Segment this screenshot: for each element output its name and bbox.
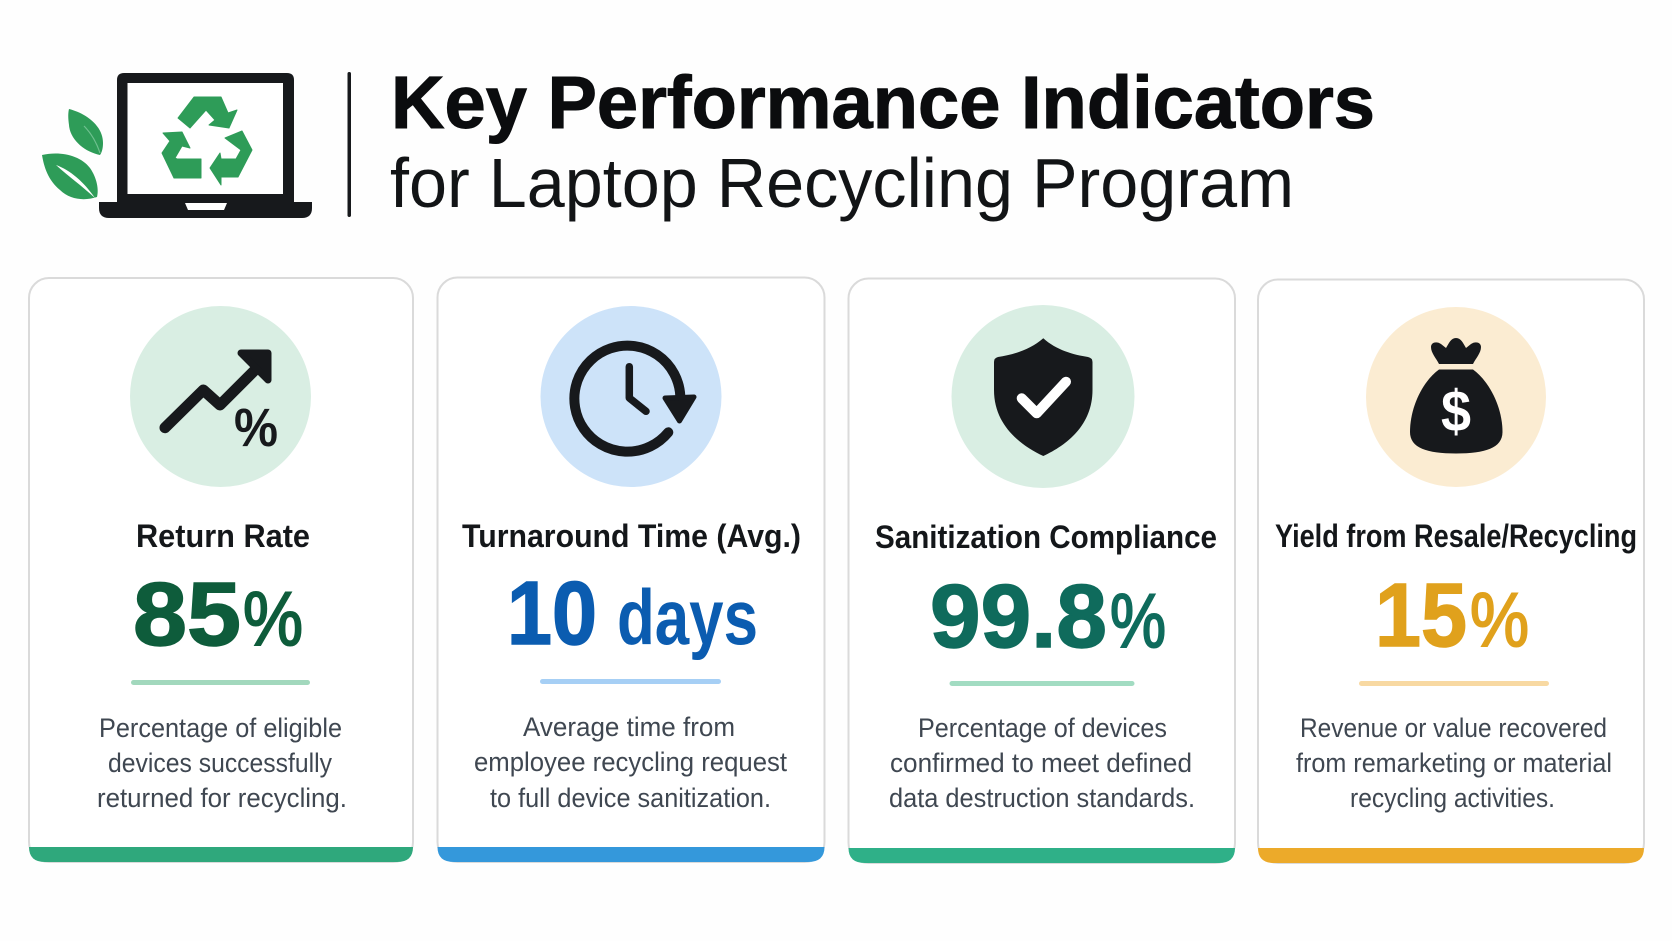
kpi name: Sanitization Compliance — [875, 519, 1217, 555]
kpi value: % — [243, 577, 303, 662]
panel: yield from resale/recycling — [1258, 280, 1644, 863]
kpi value: % — [1470, 578, 1529, 663]
icon: shield with check — [994, 338, 1092, 456]
description: from remarketing or material — [1296, 748, 1612, 778]
panel: sanitization compliance — [848, 278, 1235, 863]
header logo: laptop with recycling symbol and leaves — [42, 73, 312, 218]
icon: clock with arrow — [574, 346, 694, 452]
kpi value: % — [1110, 579, 1166, 664]
kpi value: 10 — [507, 564, 597, 664]
kpi value: 85 — [133, 565, 241, 665]
icon: money bag — [1410, 338, 1502, 454]
header divider — [348, 72, 351, 217]
heading: key performance indicators: Key Performance Indicators — [391, 61, 1375, 144]
panel: return rate — [29, 278, 413, 862]
description: Percentage of devices — [918, 713, 1167, 743]
description — [474, 712, 787, 813]
icon: rising arrow with percent — [165, 353, 278, 458]
description — [97, 713, 347, 813]
kpi value — [1375, 566, 1529, 666]
description — [1296, 713, 1612, 813]
card background — [438, 278, 824, 862]
description: Average time from — [523, 712, 735, 742]
icon: laptop — [99, 73, 312, 218]
kpi name: Return Rate — [136, 518, 310, 554]
kpi value: 15 — [1375, 566, 1467, 666]
kpi value — [133, 565, 303, 665]
icon: rising arrow with percent: % — [234, 398, 278, 458]
icon: recycling arrows — [162, 97, 252, 185]
description: returned for recycling. — [97, 783, 347, 813]
description: data destruction standards. — [889, 783, 1195, 813]
card accent bar — [1258, 848, 1644, 863]
kpi value — [507, 564, 758, 664]
divider — [131, 680, 310, 685]
description: recycling activities. — [1350, 783, 1555, 813]
icon: money bag: $ — [1441, 379, 1471, 444]
card accent bar — [29, 847, 413, 862]
card accent bar — [438, 847, 824, 862]
description: to full device sanitization. — [490, 783, 771, 813]
panel: turnaround time — [438, 278, 824, 862]
subheading: for Laptop Recycling Program — [390, 144, 1294, 222]
kpi value: 99.8 — [930, 567, 1107, 667]
description: Percentage of eligible — [99, 713, 342, 743]
card background — [29, 278, 413, 862]
divider — [950, 681, 1134, 686]
kpi value: days — [617, 573, 758, 661]
icon circle — [952, 305, 1134, 488]
description: Revenue or value recovered — [1300, 713, 1607, 743]
title — [390, 61, 1375, 222]
icon circle — [540, 306, 722, 487]
description: devices successfully — [108, 748, 332, 778]
divider — [1359, 681, 1549, 686]
card background — [1258, 280, 1644, 863]
icon circle — [1366, 307, 1546, 487]
description — [889, 713, 1195, 813]
description: employee recycling request — [474, 747, 787, 777]
kpi name: Turnaround Time (Avg.) — [462, 518, 801, 554]
icon circle — [130, 306, 311, 487]
icon: leaves — [42, 109, 103, 199]
card background — [848, 278, 1235, 863]
card accent bar — [848, 848, 1235, 863]
description: confirmed to meet defined — [890, 748, 1192, 778]
divider — [540, 679, 721, 684]
